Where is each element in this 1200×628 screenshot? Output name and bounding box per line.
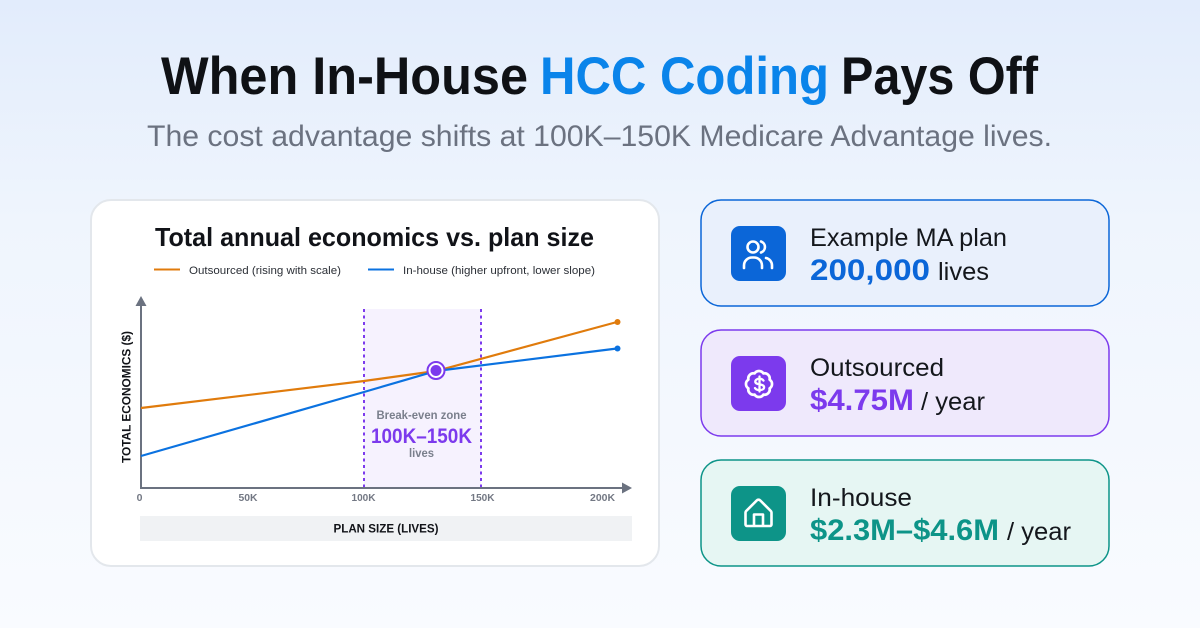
- break-even label: Break-even zone: [376, 410, 466, 422]
- line: in-house: [141, 346, 620, 456]
- icon: dollar badge: [731, 356, 786, 411]
- axes: [136, 296, 632, 494]
- title: When In-House: [161, 47, 528, 106]
- chart title: Total annual economics vs. plan size: [155, 222, 594, 252]
- x-axis tick labels: [137, 492, 615, 504]
- value: $4.75M per year: [810, 384, 985, 417]
- panel: example plan: [701, 200, 1109, 306]
- value: 200,000 lives: 200,000: [810, 254, 930, 287]
- label: outsourced: Outsourced: [810, 354, 944, 382]
- title: [161, 47, 1038, 106]
- break-even label: lives: [409, 448, 434, 460]
- panel: chart: [91, 200, 659, 566]
- icon: house: [731, 486, 786, 541]
- x-axis tick labels: 50K: [238, 492, 258, 504]
- value: $2.3M–$4.6M per year: / year: [1007, 518, 1071, 546]
- legend: In-house (higher upfront, lower slope): [403, 265, 595, 277]
- value: 200,000 lives: [810, 254, 989, 287]
- icon: people: [731, 226, 786, 281]
- subtitle: The cost advantage shifts at 100K–150K Medicare Advantage lives.: [147, 120, 1052, 153]
- value: $4.75M per year: $4.75M: [810, 384, 914, 417]
- value: $4.75M per year: / year: [921, 388, 985, 416]
- x-axis label band: PLAN SIZE (LIVES): [334, 524, 439, 536]
- panel: outsourced: [701, 330, 1109, 436]
- y-axis label: TOTAL ECONOMICS ($): [122, 331, 134, 463]
- label: in-house: In-house: [810, 484, 912, 512]
- break-even label: 100K–150K: [371, 425, 472, 448]
- title: HCC Coding: [540, 47, 829, 106]
- label: example plan: Example MA plan: [810, 224, 1007, 252]
- panel: in-house: [701, 460, 1109, 566]
- legend: [154, 265, 595, 277]
- legend: Outsourced (rising with scale): [189, 265, 341, 277]
- title: Pays Off: [841, 47, 1038, 106]
- x-axis tick labels: 150K: [470, 492, 495, 504]
- line: outsourced: [141, 319, 620, 408]
- break-even label: [371, 410, 472, 460]
- x-axis label band: [140, 516, 632, 541]
- break-even marker: [428, 362, 444, 379]
- value: $2.3M–$4.6M per year: $2.3M–$4.6M: [810, 514, 999, 547]
- value: 200,000 lives: lives: [938, 258, 989, 286]
- x-axis tick labels: 100K: [352, 492, 376, 504]
- break-even zone band: [364, 309, 481, 487]
- x-axis tick labels: 200K: [590, 492, 615, 504]
- x-axis tick labels: 0: [137, 492, 143, 504]
